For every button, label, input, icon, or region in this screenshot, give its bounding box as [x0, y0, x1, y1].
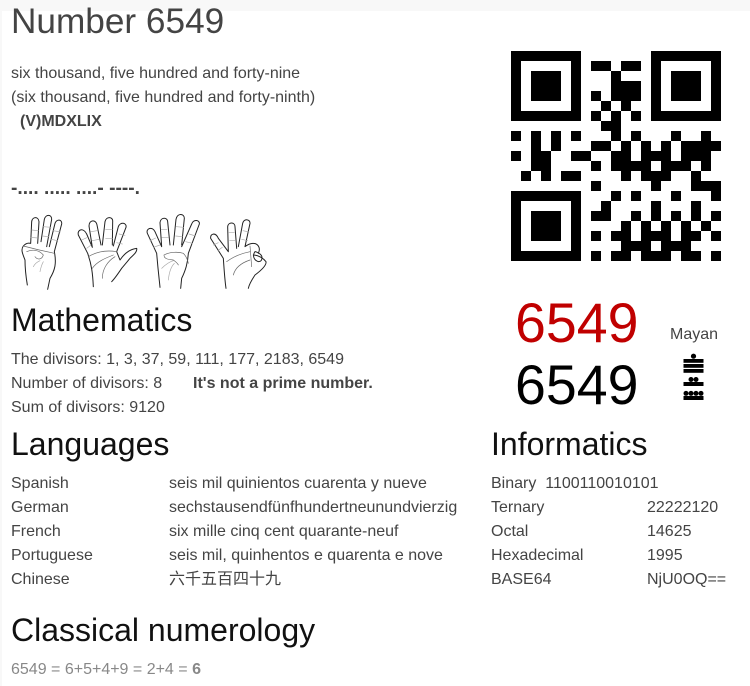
morse code: -.... ..... ....- ----. — [11, 178, 140, 199]
mathematics facts: Sum of divisors: 9120 — [11, 399, 165, 416]
icon: hand nine — [211, 220, 266, 288]
icon: hand five — [78, 218, 137, 287]
informatics labels: Octal — [491, 523, 528, 540]
mathematics facts: It's not a prime number. — [193, 375, 373, 392]
number in each language: six mille cinq cent quarante-neuf — [169, 523, 398, 540]
red number 6549: 6549 — [515, 292, 638, 354]
informatics labels: Binary 1100110010101 — [491, 475, 659, 492]
language names — [11, 475, 93, 588]
heading: Classical numerology: Classical numerology — [11, 612, 315, 648]
language names: German — [11, 499, 69, 516]
informatics values: NjU0OQ== — [647, 571, 726, 588]
language names: Chinese — [11, 571, 70, 588]
icon: hand four — [147, 214, 199, 288]
informatics labels: BASE64 — [491, 571, 551, 588]
informatics labels — [491, 475, 659, 588]
finder patterns — [511, 51, 721, 261]
informatics values: 14625 — [647, 523, 692, 540]
number in each language: sechstausendfünfhundertneunundvierzig — [169, 499, 457, 516]
number in each language: seis mil quinientos cuarenta y nueve — [169, 475, 427, 492]
icon: sign language hands — [22, 214, 267, 290]
informatics labels: Hexadecimal — [491, 547, 583, 564]
icon: Mayan numerals — [684, 354, 704, 400]
number in words: six thousand, five hundred and forty-nine — [11, 65, 300, 82]
data modules — [511, 61, 721, 261]
mathematics facts — [11, 351, 373, 416]
mathematics facts: The divisors: 1, 3, 37, 59, 111, 177, 2183, 6549 — [11, 351, 344, 368]
heading: Languages: Languages — [11, 426, 169, 462]
language names: Portuguese — [11, 547, 93, 564]
Mayan label: Mayan — [670, 326, 718, 343]
informatics values: 1995 — [647, 547, 683, 564]
mathematics facts: Number of divisors: 8 — [11, 375, 162, 392]
icon: hand six — [22, 215, 62, 289]
language names: Spanish — [11, 475, 69, 492]
black number 6549: 6549 — [515, 354, 638, 416]
language names: French — [11, 523, 61, 540]
number in each language: seis mil, quinhentos e quarenta e nove — [169, 547, 443, 564]
number in each language — [169, 475, 457, 588]
informatics values — [647, 499, 726, 588]
icon: QR code — [511, 51, 721, 261]
number in words: (V)MDXLIX — [20, 113, 102, 130]
numerology sum: 6549 = 6+5+4+9 = 2+4 = 6 — [11, 661, 201, 678]
informatics values: 22222120 — [647, 499, 718, 516]
number in words: (six thousand, five hundred and forty-ninth) — [11, 89, 315, 106]
number in words — [11, 65, 315, 130]
number in each language: 六千五百四十九 — [169, 571, 281, 588]
title: Number 6549 — [11, 2, 224, 41]
heading: Informatics: Informatics — [491, 426, 647, 462]
informatics labels: Ternary — [491, 499, 544, 516]
heading: Mathematics: Mathematics — [11, 302, 192, 338]
